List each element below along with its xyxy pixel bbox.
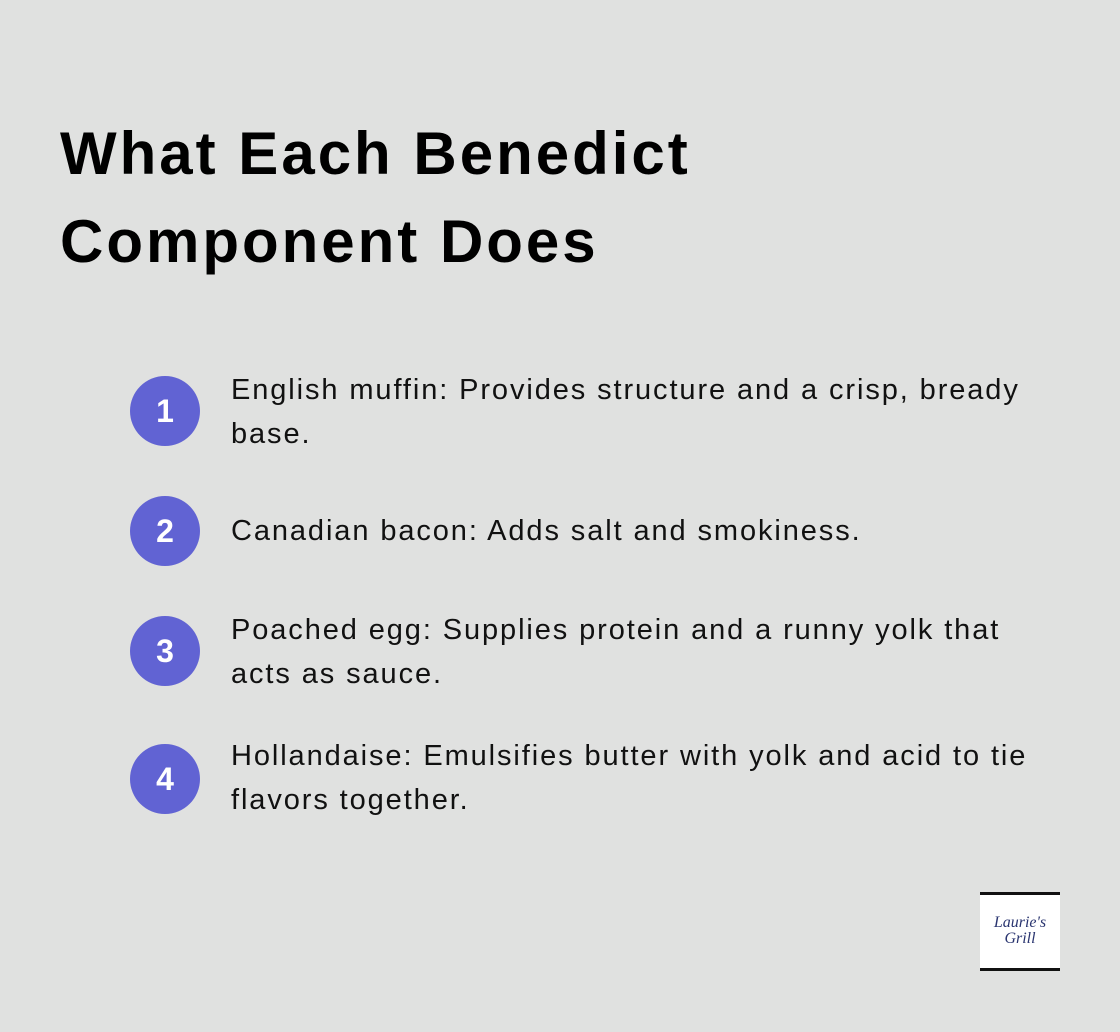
circle 1 [130, 376, 200, 446]
text 3 [231, 614, 1000, 690]
text 1: English muffin: Provides structure and a crisp, bready [231, 374, 1020, 406]
circle 2 [130, 496, 200, 566]
logo: Grill [1004, 930, 1036, 947]
circle 4: 4 [156, 761, 174, 797]
title: What Each Benedict [60, 120, 691, 187]
text 3: acts as sauce. [231, 658, 443, 690]
circle 3 [130, 616, 200, 686]
logo [980, 892, 1060, 971]
text 4: flavors together. [231, 784, 470, 816]
circle 4 [130, 744, 200, 814]
item 3 [130, 614, 1000, 690]
text 3: Poached egg: Supplies protein and a runny yolk that [231, 614, 1000, 646]
text 2: Canadian bacon: Adds salt and smokiness. [231, 515, 862, 547]
circle 1: 1 [156, 393, 174, 429]
circle 3: 3 [156, 633, 174, 669]
item 1 [130, 374, 1020, 450]
text 4: Hollandaise: Emulsifies butter with yolk and acid to tie [231, 740, 1027, 772]
text 1 [231, 374, 1020, 450]
title [60, 120, 691, 275]
logo: Laurie's [994, 914, 1046, 931]
text 4 [231, 740, 1027, 816]
title: Component Does [60, 208, 599, 275]
circle 2: 2 [156, 513, 174, 549]
item 2 [130, 496, 862, 566]
item 4 [130, 740, 1027, 816]
text 1: base. [231, 418, 311, 450]
